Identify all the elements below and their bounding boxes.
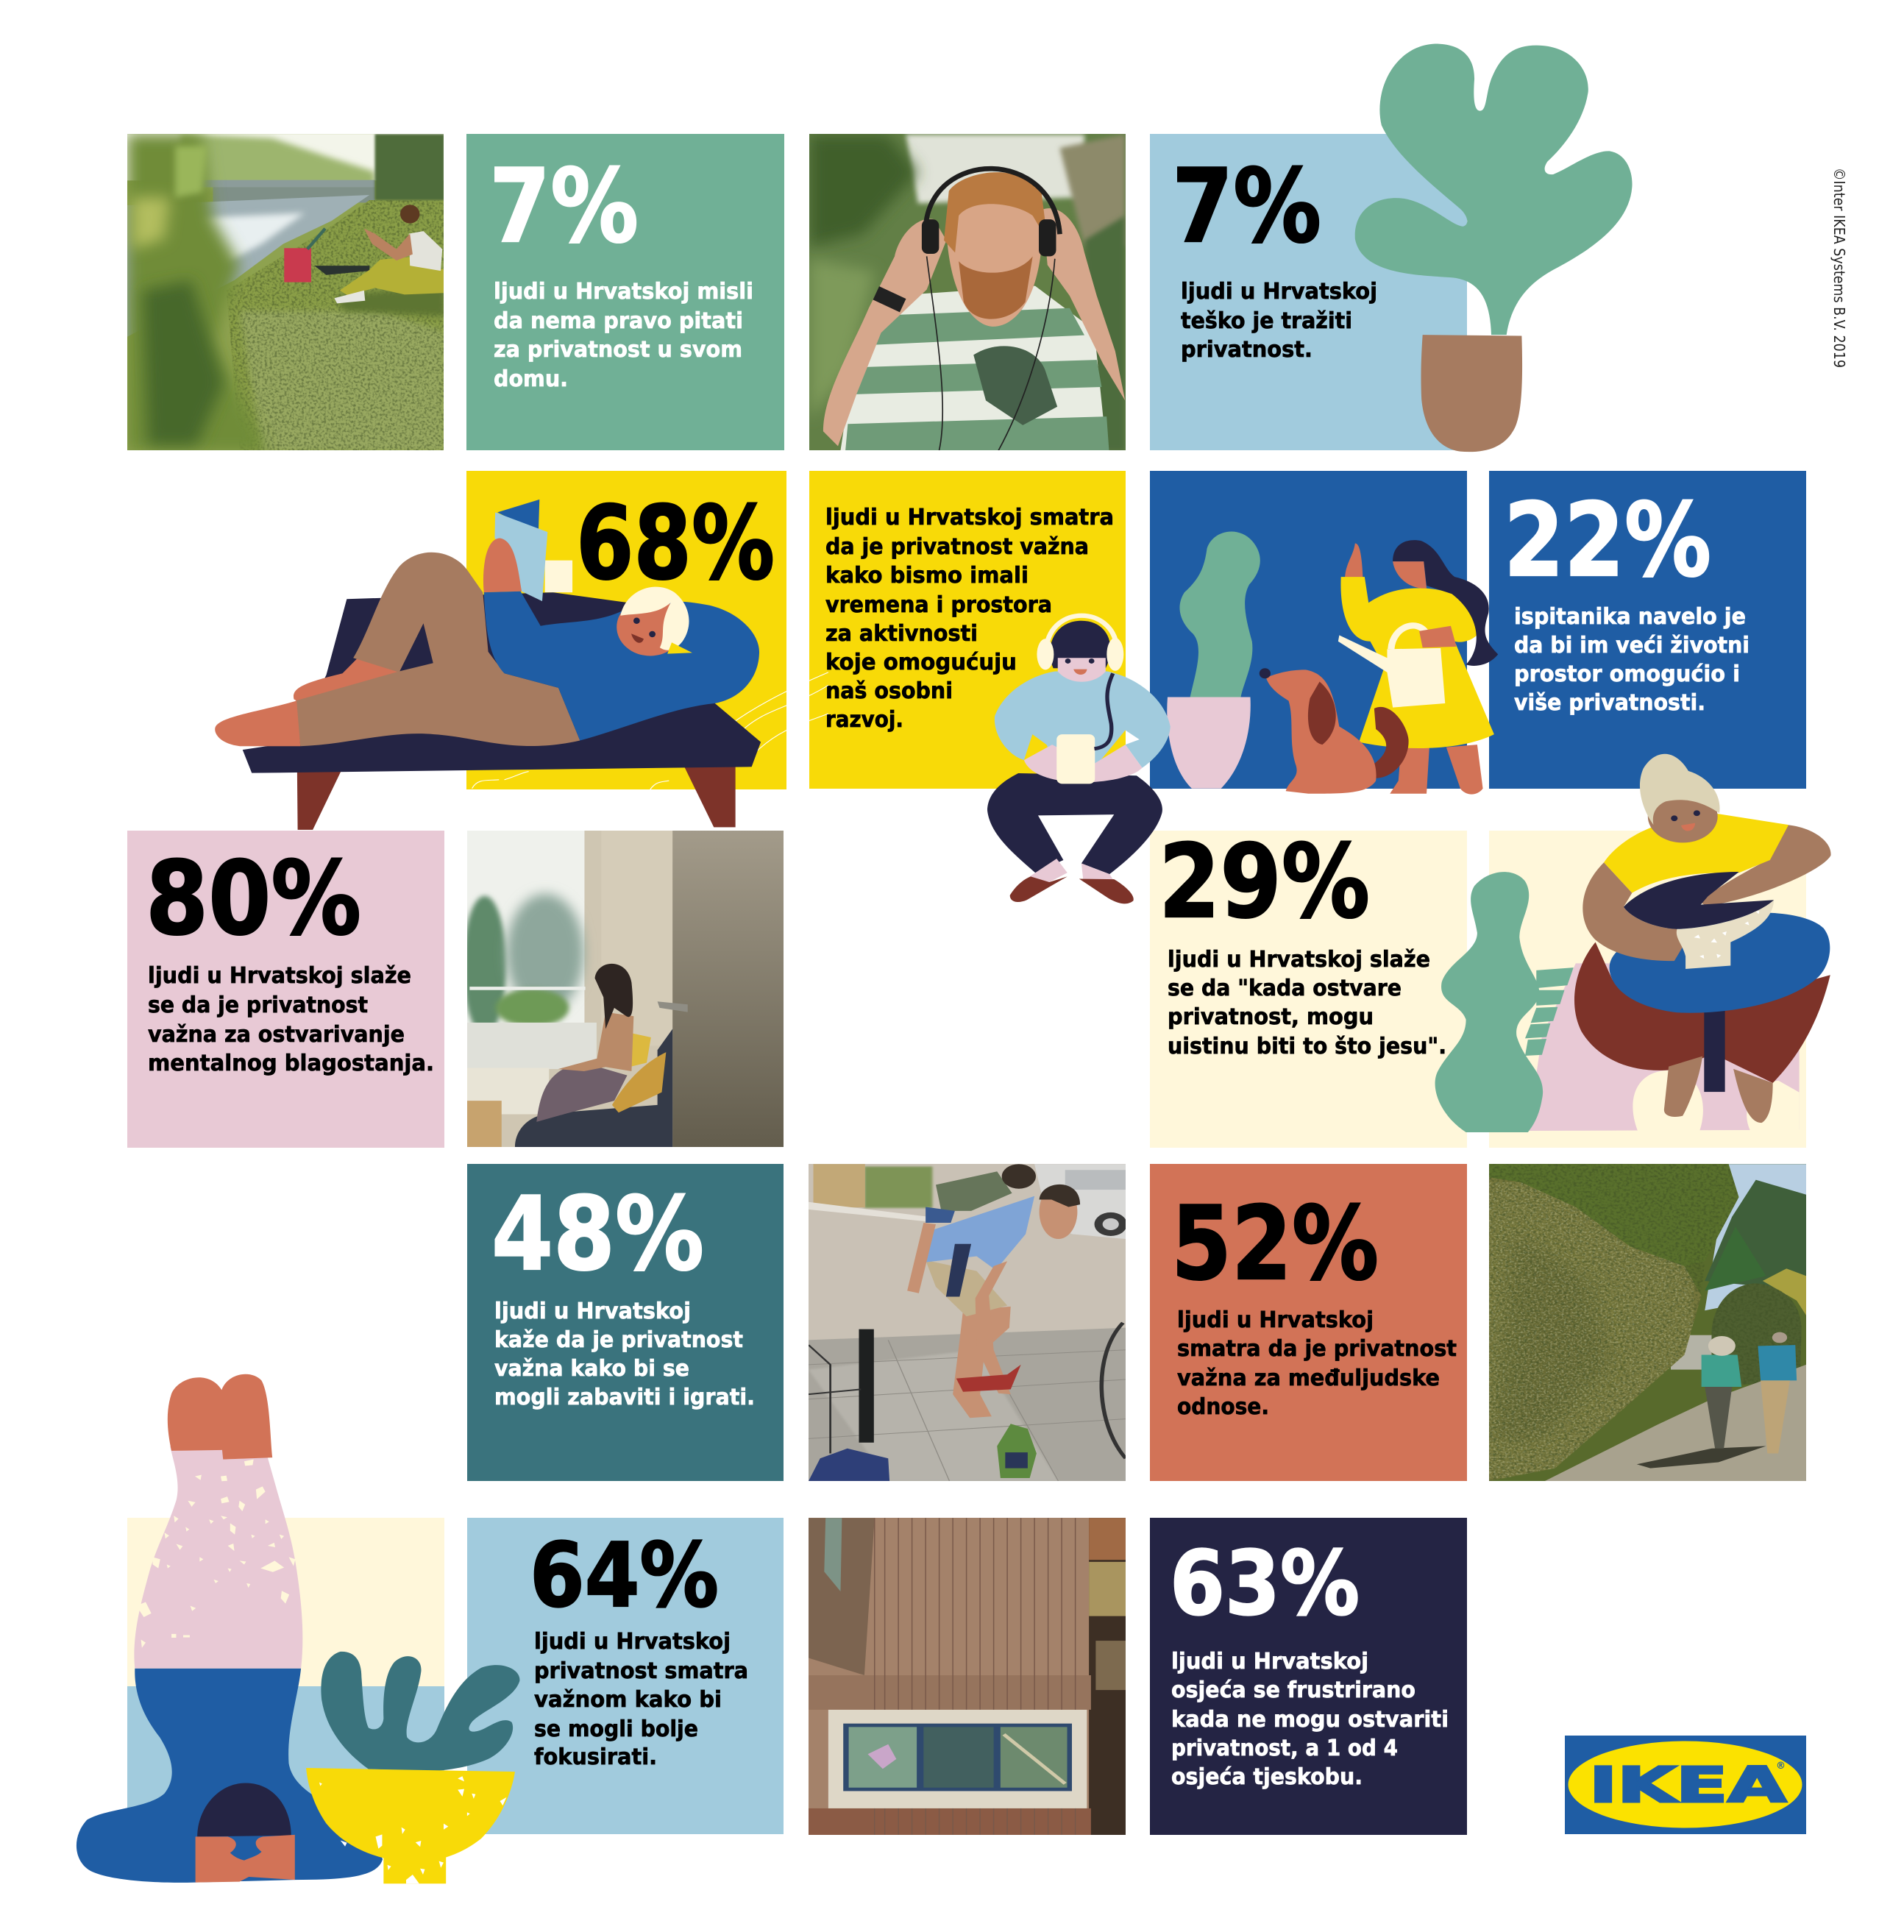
photo: woman reading by the river [127,134,450,455]
plant [1435,872,1543,1132]
woman legs [1390,745,1483,795]
foot front [215,700,300,746]
sweater [484,592,759,740]
head [617,587,692,656]
trousers [296,553,580,746]
photo: wooden deck with stained glass window [806,1516,1128,1837]
ear pads [1037,639,1054,670]
card: 63% navy [1150,1518,1467,1835]
leg speckles [136,1460,295,1648]
card background [466,134,784,450]
body and arm [1582,862,1683,961]
description: odnose. [1177,1394,1269,1420]
description [825,505,1114,733]
description: mogli zabaviti i igrati. [494,1385,755,1410]
pot [1421,335,1522,452]
pink floor [1528,963,1800,1131]
card: 68% yellow [466,471,786,789]
stat: 7% [1172,147,1321,266]
card background [466,471,786,789]
description [1181,279,1377,363]
description: fokusirati. [534,1744,657,1770]
description: ljudi u Hrvatskoj slaže [1168,947,1430,973]
card background [1150,1518,1467,1835]
pattern lines on yellow [472,672,828,789]
description: ljudi u Hrvatskoj slaže [148,963,411,989]
card background [1150,831,1467,1148]
description: privatnost, mogu [1168,1004,1374,1030]
card background [467,1518,784,1834]
description: ljudi u Hrvatskoj [534,1629,731,1655]
card: 7% green [466,134,784,450]
description: prostor omogućio i [1514,661,1740,687]
photo: woman looking out of the window [463,830,787,1148]
logo: IKEA: ® [1776,1761,1786,1772]
hands [196,1835,295,1883]
description: naš osobni [825,678,953,704]
copyright note: ©Inter IKEA Systems B.V. 2019 [1830,168,1848,368]
photo: father carrying child on his back [806,1162,1128,1483]
tablet [1056,734,1095,784]
bowl speckles [319,1776,506,1883]
card: yellow text [809,471,1126,789]
hand [483,539,522,592]
forearms [1024,745,1143,782]
card: 64% light blue [467,1518,784,1834]
face [1393,561,1427,589]
feet [168,1374,272,1460]
description: kada ne mogu ostvariti [1171,1707,1449,1733]
card: 80% pink [127,831,444,1148]
description: da nema pravo pitati [494,308,743,334]
card: 7% light blue [1150,134,1467,450]
panel: cream and blue background [127,1518,444,1834]
description: za aktivnosti [825,621,978,647]
description: privatnost. [1181,337,1312,363]
description: kaže da je privatnost [494,1327,743,1353]
description [1168,947,1446,1059]
sofa legs [297,765,736,830]
description: važnom kako bi [534,1687,722,1713]
card: 29% cream [1150,823,1467,1148]
yellow bowl [306,1768,515,1883]
hair [197,1783,291,1836]
watering can [1338,625,1457,708]
description: privatnost, a 1 od 4 [1171,1736,1398,1761]
illustration: blue scene with plant, dog and woman [1167,532,1498,795]
description: da je privatnost važna [825,534,1089,560]
description: kako bismo imali [825,563,1029,589]
face [1058,658,1106,682]
dress [1340,577,1494,748]
description: se da je privatnost [148,992,368,1018]
legs [1664,1056,1773,1123]
description: razvoj. [825,707,903,733]
description: uistinu biti to što jesu". [1168,1034,1446,1059]
head [1648,790,1718,842]
description: se mogli bolje [534,1716,698,1742]
hair [1393,540,1498,666]
panel: blue scene background [1150,471,1467,789]
bowl [1677,900,1774,969]
description: ljudi u Hrvatskoj [1181,279,1377,305]
hair [1640,754,1720,825]
description: važna kako bi se [494,1356,689,1382]
description [148,963,434,1076]
card: 48% teal [467,1164,784,1481]
skirt [1574,942,1830,1083]
stat: 63% [1170,1533,1360,1636]
description: privatnost smatra [534,1658,748,1684]
description [534,1629,748,1770]
description: vremena i prostora [825,592,1052,618]
card background [467,1164,784,1481]
description: smatra da je privatnost [1177,1336,1457,1362]
trousers and shoes [987,773,1162,903]
description: ljudi u Hrvatskoj [1171,1649,1368,1674]
photo: couple walking on a path [1487,1162,1808,1485]
logo: IKEA: IKEA [1589,1757,1786,1814]
card background [1150,1164,1467,1481]
description [494,1299,755,1410]
description: koje omogućuju [825,650,1017,675]
stat: 29% [1159,823,1370,941]
panel: cream scene background [1489,831,1806,1148]
torso [77,1669,383,1883]
stat: 22% [1504,481,1711,600]
sofa [243,592,761,773]
stat: 48% [491,1175,704,1293]
shirt [1604,813,1788,893]
description: osjeća se frustrirano [1171,1677,1415,1703]
sweater [995,671,1171,768]
cream blobs [1633,1070,1800,1131]
description: za privatnost u svom [494,337,742,363]
card background [809,471,1126,789]
description: važna za ostvarivanje [148,1022,405,1048]
card: 52% orange [1150,1164,1467,1481]
description [494,279,753,392]
description: osjeća tjeskobu. [1171,1764,1363,1790]
description [1171,1649,1449,1790]
leaf [1355,43,1633,335]
stat: 7% [489,147,639,266]
photo: man with headphones [807,132,1128,455]
legs [134,1446,302,1669]
logo: IKEA [1565,1736,1806,1834]
illustration: person doing a headstand with bowl plant [77,1374,519,1883]
illustration: man reading on a sofa [215,500,828,830]
card background [127,831,444,1148]
description: ljudi u Hrvatskoj [1177,1307,1374,1333]
bowl inner [1624,872,1774,929]
description: ljudi u Hrvatskoj misli [494,279,753,305]
description: da bi im veći životni [1514,633,1750,658]
stool post [1704,1010,1725,1092]
description: domu. [494,366,568,392]
plant [1179,532,1260,697]
book [494,500,547,601]
stat: 64% [530,1525,719,1627]
card background [1489,471,1806,789]
card background [1150,134,1467,450]
stat: 80% [146,839,361,958]
description: više privatnosti. [1514,690,1705,716]
stat: 52% [1171,1185,1379,1303]
description: ispitanika navelo je [1514,604,1746,630]
description [1177,1307,1457,1420]
dog [1260,668,1409,794]
card: 22% blue [1489,471,1806,789]
cream square [545,561,572,592]
teal plant [321,1652,519,1771]
illustration: woman with bowl and plant [1435,754,1831,1132]
wire [1094,673,1113,749]
illustration: potted plant [1355,43,1633,452]
stool top [1610,912,1830,1013]
description [1514,604,1750,716]
ladder slats [1525,967,1574,1056]
bowl speckles [1694,911,1759,959]
raised hand [1345,544,1363,580]
description: ljudi u Hrvatskoj smatra [825,505,1114,530]
description: se da "kada ostvare [1168,976,1402,1001]
description: ljudi u Hrvatskoj [494,1299,691,1324]
headphone band [1046,616,1117,647]
foot behind [294,656,399,700]
description: teško je tražiti [1181,308,1352,334]
stat: 68% [576,484,775,603]
hair [1050,621,1110,668]
pot [1167,697,1251,789]
illustration: kid with headphones [987,616,1171,903]
description: mentalnog blagostanja. [148,1051,434,1076]
description: važna za međuljudske [1177,1365,1440,1391]
